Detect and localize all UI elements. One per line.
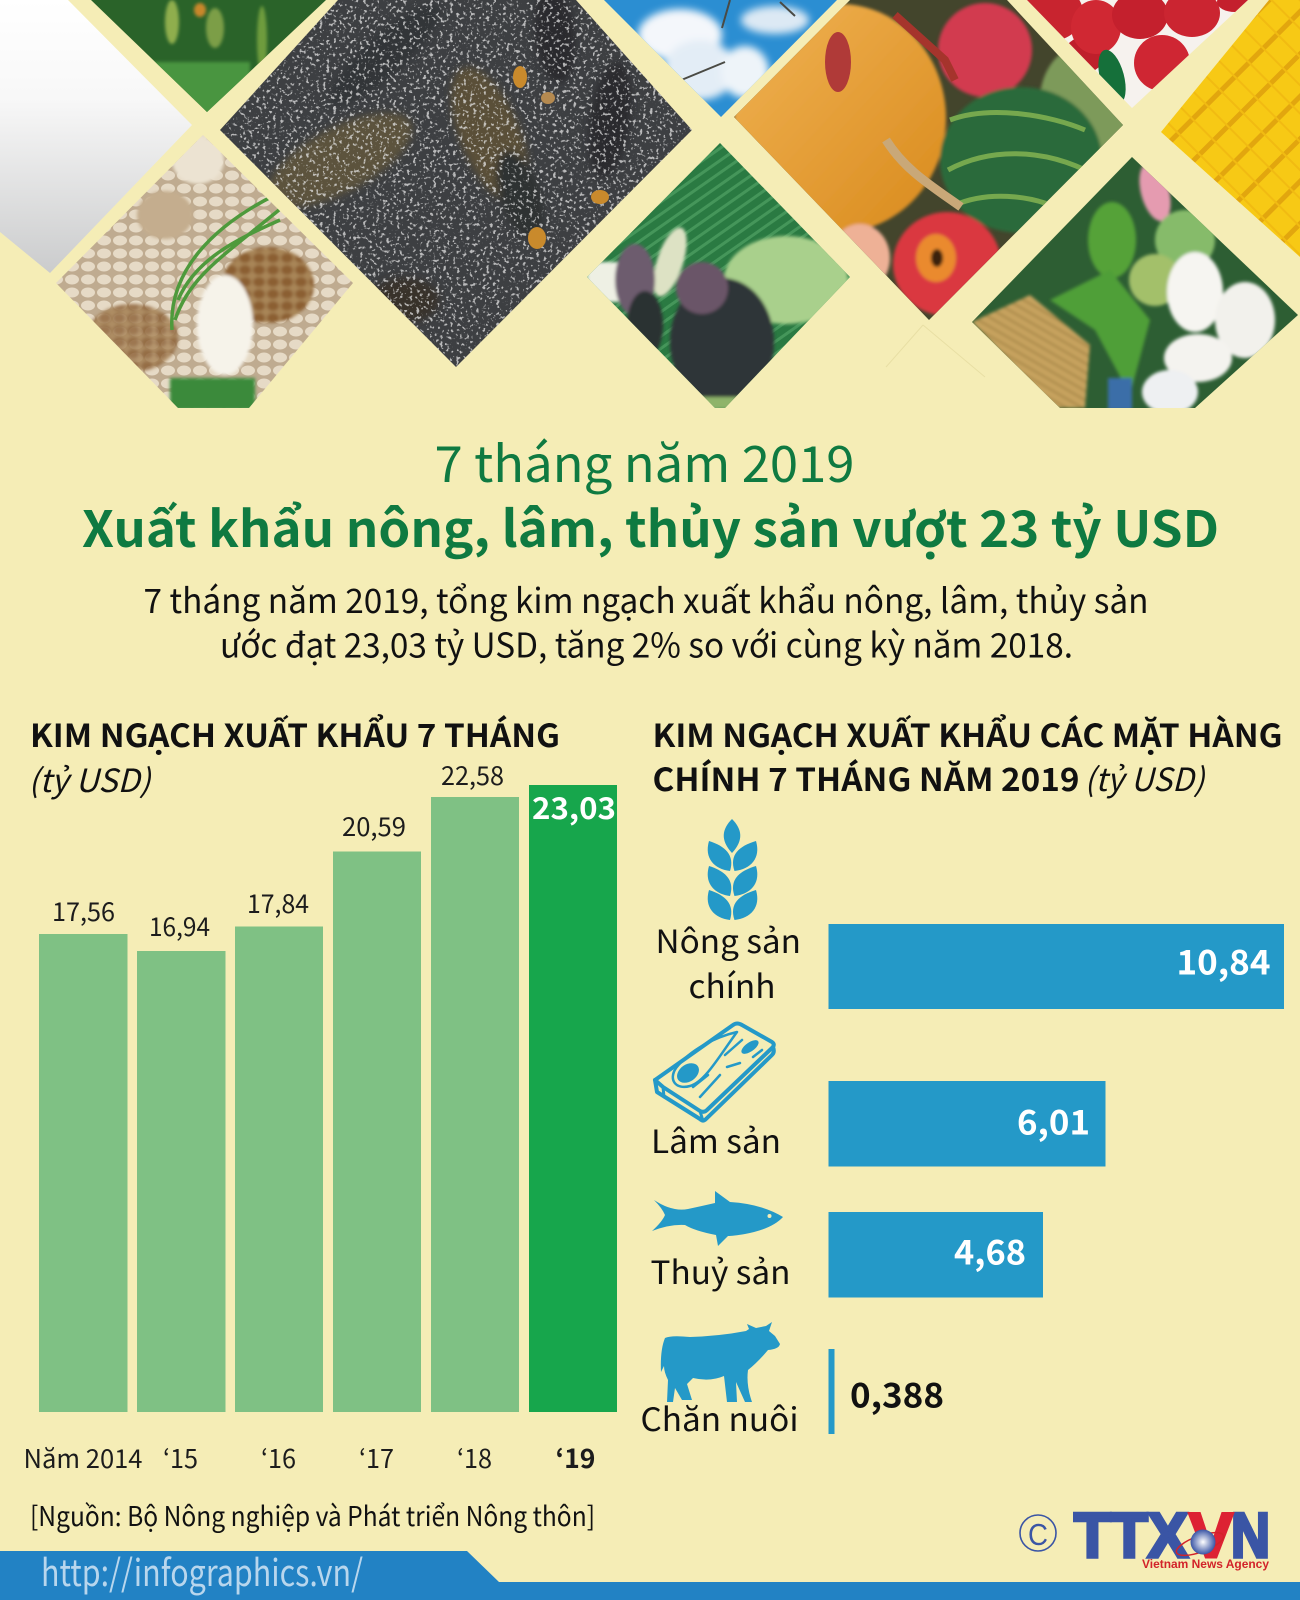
footer band xyxy=(0,1551,1300,1600)
photo tile: white gradient xyxy=(0,0,200,280)
title line 2: Xuất khẩu nông, lâm, thủy sản vượt 23 tỷ USD xyxy=(82,490,1219,562)
intro line 2: ước đạt 23,03 tỷ USD, tăng 2% so với cùng kỳ năm 2018. xyxy=(220,618,1073,668)
product chart heading xyxy=(652,711,1282,801)
chart unit: (tỷ USD) xyxy=(28,756,152,802)
logo letters: N xyxy=(1231,1501,1270,1571)
label: Chăn nuôi: Chăn nuôi xyxy=(640,1395,798,1441)
footer url: http://infographics.vn/ xyxy=(41,1543,363,1597)
logo: TTXVN xyxy=(1020,1501,1270,1571)
bar 2018 xyxy=(431,797,519,1412)
intro line 1: 7 tháng năm 2019, tổng kim ngạch xuất khẩu nông, lâm, thủy sản xyxy=(144,574,1148,623)
bar 2014 xyxy=(39,934,128,1412)
photo tile: lychee xyxy=(1019,0,1253,108)
panel: export by product xyxy=(640,711,1284,1441)
value labels: 22,58 xyxy=(441,756,504,793)
value 2019: 23,03 xyxy=(532,784,616,828)
year axis labels: ‘17 xyxy=(359,1439,394,1476)
icon: cow xyxy=(661,1322,780,1402)
product chart heading: KIM NGẠCH XUẤT KHẨU CÁC MẶT HÀNG xyxy=(652,711,1282,757)
icon: fish xyxy=(652,1191,783,1246)
label: Nông sản chính xyxy=(656,917,801,1008)
value: 0,388: 0,388 xyxy=(850,1368,944,1418)
icon: wood knot fill xyxy=(673,1038,761,1087)
copyright symbol: C xyxy=(1028,1517,1048,1552)
value: 6,01: 6,01 xyxy=(1017,1096,1090,1144)
icon: wood plank xyxy=(655,1024,774,1121)
title line 1: 7 tháng năm 2019 xyxy=(434,425,854,497)
title xyxy=(82,425,1219,562)
icon: wheat xyxy=(708,819,757,920)
logo letters: V xyxy=(1189,1501,1233,1571)
value: 10,84: 10,84 xyxy=(1176,936,1270,984)
bar: Thuỷ sản xyxy=(828,1212,1043,1298)
product chart heading: CHÍNH 7 THÁNG NĂM 2019 xyxy=(652,755,1080,801)
bar 2016 xyxy=(235,926,323,1412)
year axis labels: Năm 2014 xyxy=(24,1439,142,1476)
photo tile: green crops xyxy=(91,0,326,114)
value labels: 20,59 xyxy=(342,807,406,844)
label: Lâm sản: Lâm sản xyxy=(651,1117,781,1163)
bar: Lâm sản xyxy=(828,1081,1106,1166)
photo tile: pumpkin and fruit xyxy=(734,0,1130,320)
bar: Nông sản chính xyxy=(828,924,1284,1009)
photo tile: carp fish xyxy=(220,0,692,367)
year axis labels xyxy=(24,1439,596,1476)
photo tile: vegetables xyxy=(587,143,850,409)
bar: Chăn nuôi xyxy=(828,1349,834,1434)
logo tagline: Vietnam News Agency xyxy=(1142,1557,1269,1571)
year axis labels: ‘18 xyxy=(457,1439,492,1476)
photo tile: corn xyxy=(1161,0,1300,257)
year axis labels: ‘19 xyxy=(556,1439,596,1476)
value labels: 17,56 xyxy=(52,892,115,929)
photo tile: sky and birds xyxy=(604,0,837,117)
bar 2017 xyxy=(333,852,421,1412)
label: Nông sản chính: Nông sản xyxy=(656,917,801,963)
value labels: 16,94 xyxy=(149,907,210,944)
logo globe xyxy=(1174,1528,1226,1560)
chart heading: KIM NGẠCH XUẤT KHẨU 7 THÁNG xyxy=(30,711,560,757)
source note: [Nguồn: Bộ Nông nghiệp và Phát triển Nông thôn] xyxy=(30,1495,595,1534)
intro text xyxy=(144,574,1148,668)
photo tile: cotton and leaves xyxy=(972,157,1298,414)
label: Thuỷ sản: Thuỷ sản xyxy=(650,1248,790,1294)
copyright symbol xyxy=(1020,1515,1056,1552)
photo tile: mushrooms xyxy=(56,135,356,410)
year axis labels: ‘15 xyxy=(163,1439,198,1476)
value labels xyxy=(52,756,504,944)
panel: yearly export bar chart xyxy=(24,711,617,1476)
product chart heading: (tỷ USD) xyxy=(1084,755,1206,801)
logo letters: TTX xyxy=(1074,1501,1188,1571)
photo collage banner xyxy=(0,0,1300,414)
logo letters xyxy=(1074,1501,1270,1571)
value: 4,68: 4,68 xyxy=(954,1226,1026,1274)
label: Nông sản chính: chính xyxy=(688,962,776,1008)
bar 2019 xyxy=(529,785,617,1412)
value labels: 17,84 xyxy=(247,884,309,921)
bar 2015 xyxy=(137,951,226,1412)
year axis labels: ‘16 xyxy=(261,1439,296,1476)
